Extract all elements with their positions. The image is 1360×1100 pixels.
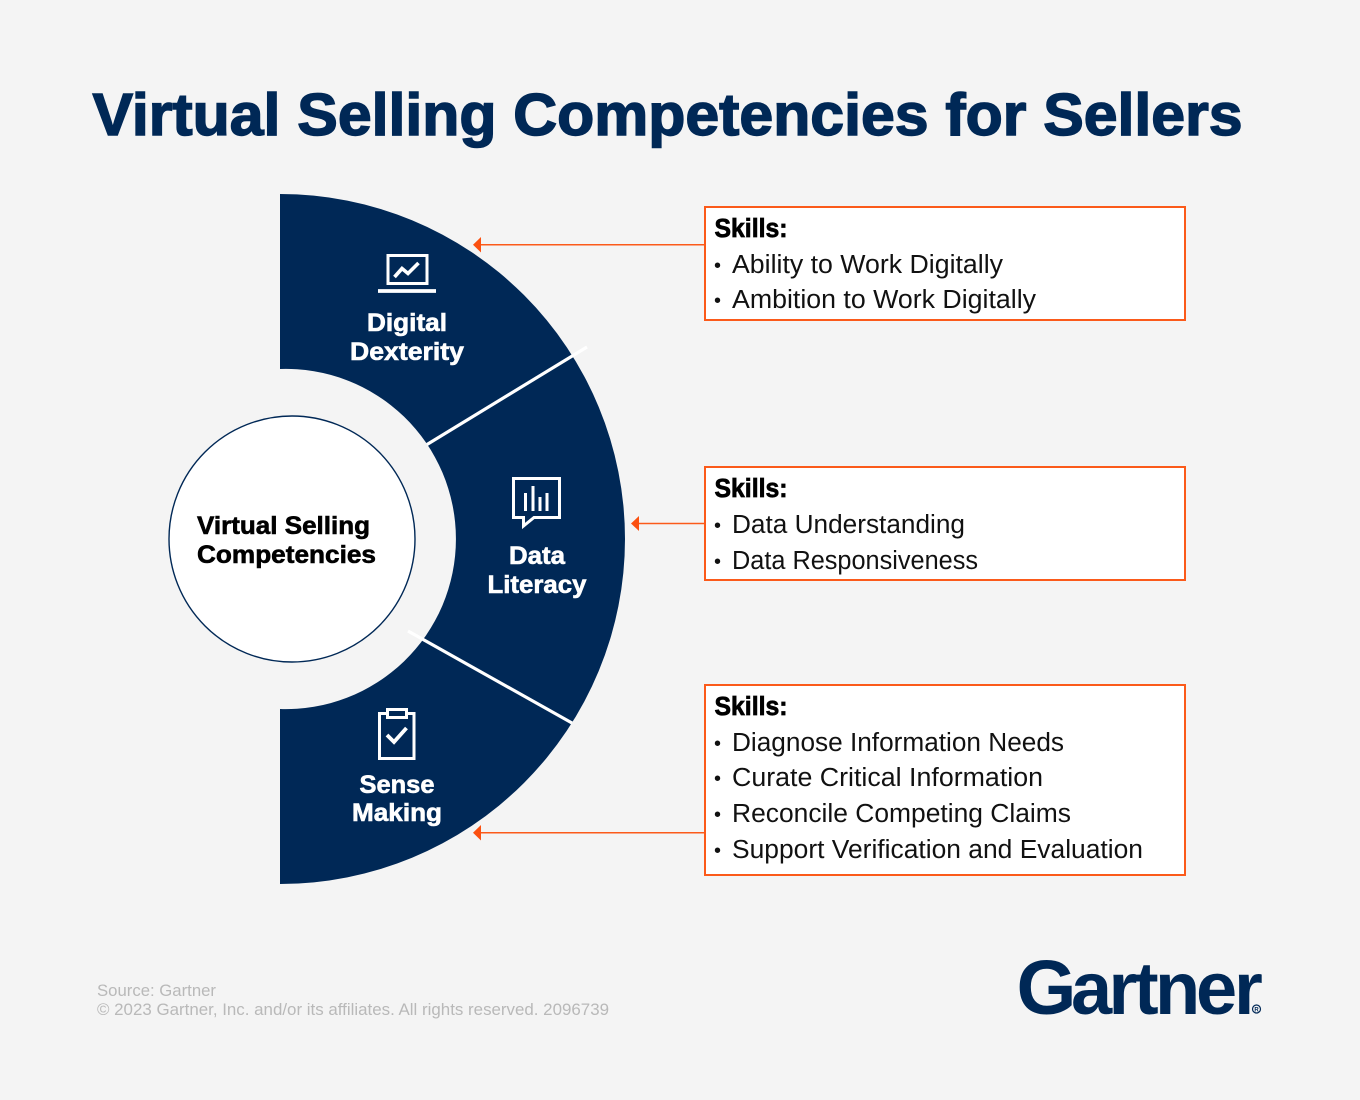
- callout: sense making skills: •: [714, 804, 721, 826]
- callout: sense making skills: Reconcile Competing Claims: [732, 800, 1071, 828]
- callout: sense making skills: •: [714, 768, 721, 790]
- icon: clipboard with check: [380, 710, 414, 758]
- logo: Gartner: R: [1254, 1008, 1259, 1014]
- callout: digital dexterity skills: Skills:: [714, 215, 788, 243]
- callout: data literacy skills: •: [714, 515, 721, 537]
- callout: data literacy skills: Skills:: [714, 475, 788, 503]
- callout: data literacy skills: Data Understanding: [732, 511, 965, 539]
- icon: laptop with chart: [378, 256, 436, 291]
- label: data literacy: Literacy: [488, 571, 587, 599]
- callout: digital dexterity skills: •: [714, 255, 721, 277]
- label: sense making: Sense: [360, 771, 435, 799]
- callout: sense making skills: [705, 685, 1185, 875]
- callout: digital dexterity skills: •: [714, 290, 721, 312]
- label: digital dexterity: Dexterity: [350, 338, 464, 366]
- callout: data literacy skills: [705, 467, 1185, 580]
- callout: sense making skills: Diagnose Information Needs: [732, 729, 1064, 757]
- label: digital dexterity: Digital: [367, 309, 447, 337]
- arrow: sense making: [473, 825, 705, 840]
- title: Virtual Selling Competencies for Sellers: [92, 82, 1242, 148]
- callout: digital dexterity skills: Ambition to Work Digitally: [732, 286, 1036, 314]
- label: sense making: Making: [352, 799, 442, 827]
- source note: Source: Gartner: [97, 982, 217, 1000]
- callout: sense making skills: Support Verification and Evaluation: [732, 836, 1143, 864]
- center circle: [169, 416, 415, 662]
- callout: data literacy skills: Data Responsiveness: [732, 547, 978, 575]
- divider: digital dexterity and data literacy: [427, 347, 587, 444]
- arrow: digital dexterity: [473, 237, 705, 252]
- callout: sense making skills: Skills:: [714, 693, 788, 721]
- semicircle competencies diagram: [169, 194, 625, 884]
- center label: Competencies: [197, 541, 376, 569]
- label: data literacy: Data: [509, 542, 566, 570]
- callout: data literacy skills: •: [714, 551, 721, 573]
- callout: sense making skills: Curate Critical Information: [732, 764, 1043, 792]
- source note: [97, 982, 609, 1019]
- icon: speech bubble with bar chart: [514, 478, 560, 526]
- callout: sense making skills: •: [714, 733, 721, 755]
- center label: Virtual Selling: [197, 512, 370, 540]
- label: digital dexterity: [350, 309, 464, 366]
- source note: © 2023 Gartner, Inc. and/or its affiliates. All rights reserved. 2096739: [97, 1001, 609, 1019]
- label: sense making: [352, 771, 442, 827]
- label: data literacy: [488, 542, 587, 599]
- center label: [197, 512, 376, 569]
- divider: data literacy and sense making: [408, 631, 572, 723]
- callout: digital dexterity skills: [705, 207, 1185, 320]
- arrow: data literacy: [631, 516, 705, 531]
- callout: digital dexterity skills: Ability to Work Digitally: [732, 251, 1003, 279]
- ring segments: [280, 194, 625, 884]
- logo: Gartner: artner: [1071, 947, 1263, 1030]
- logo: Gartner: G: [1016, 945, 1076, 1031]
- callout: sense making skills: •: [714, 840, 721, 862]
